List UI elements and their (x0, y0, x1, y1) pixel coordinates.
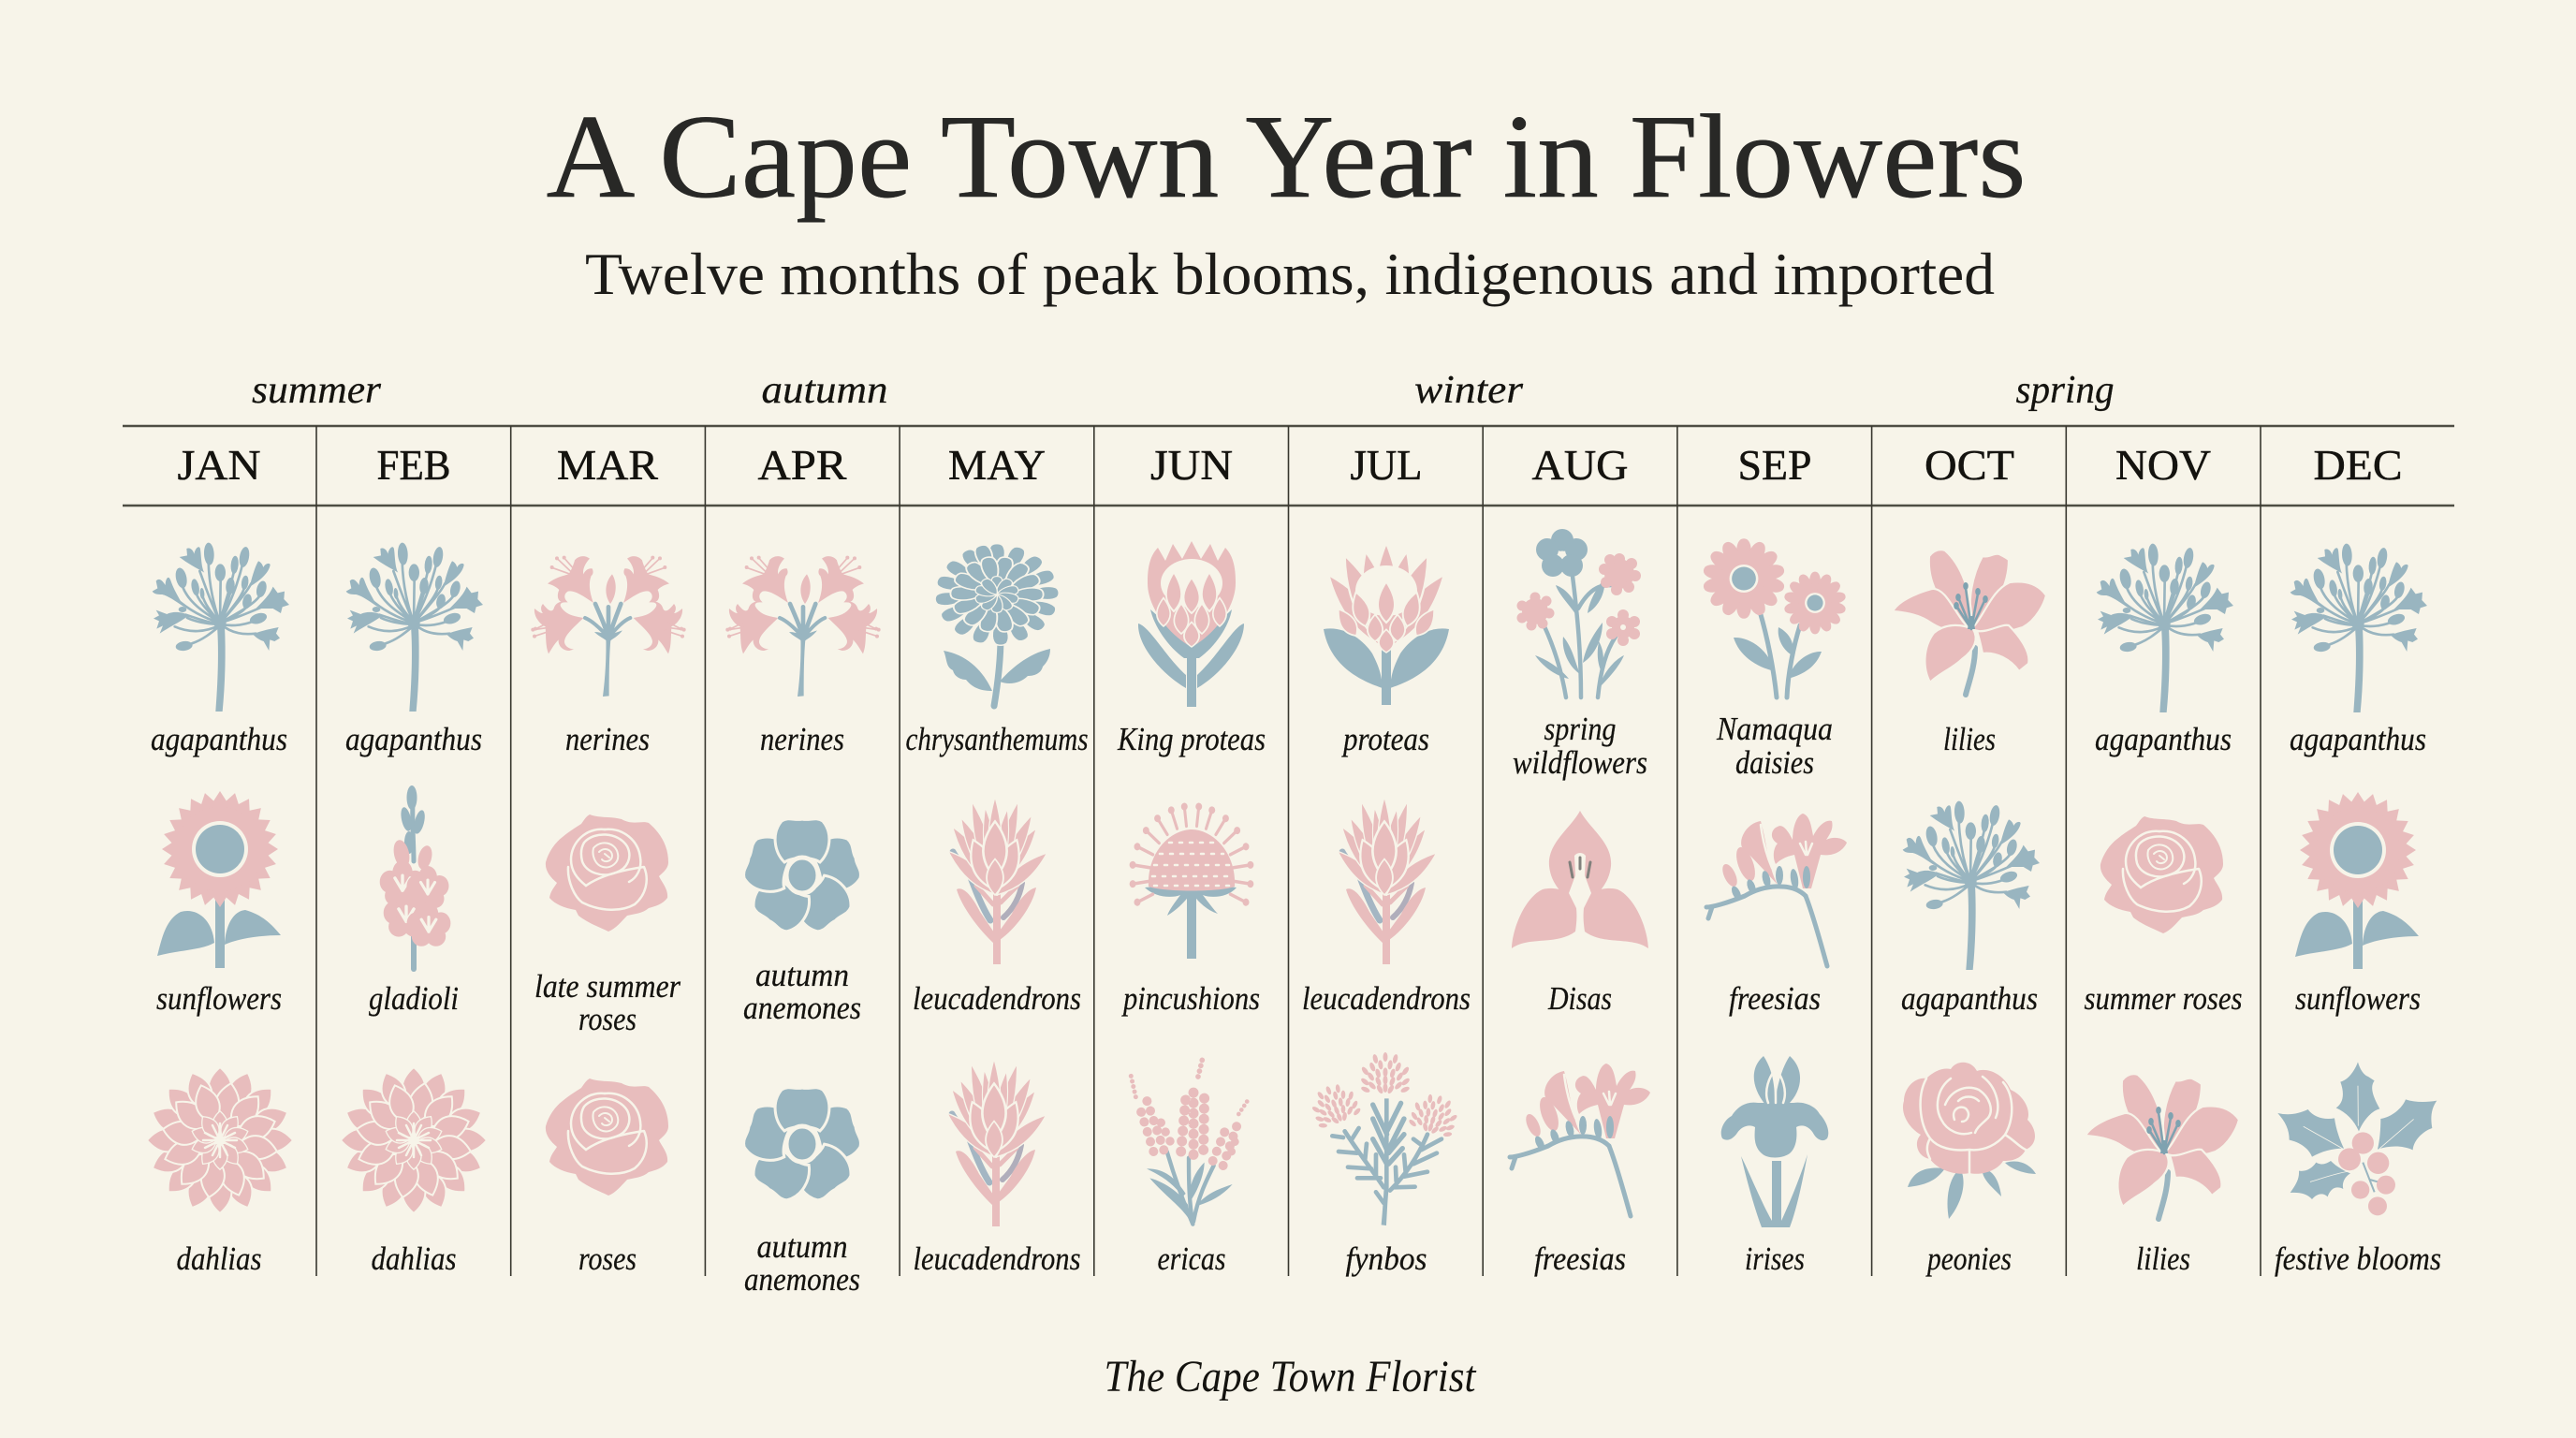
icon: king protea (1138, 541, 1244, 707)
month heading: SEP: SEP (1737, 442, 1812, 489)
icon: anemone (740, 1088, 864, 1206)
label: freesias: freesias (1534, 1240, 1626, 1277)
panel: JUN column (1117, 442, 1266, 1277)
season label: winter: winter (1414, 369, 1524, 412)
label: peonies: peonies (1925, 1240, 2012, 1277)
icon: anemone (740, 819, 864, 937)
icon: iris (1721, 1056, 1828, 1227)
label: leucadendrons: leucadendrons (913, 980, 1081, 1017)
icon: rose (546, 814, 668, 932)
icon: rose (2100, 816, 2223, 933)
label: agapanthus: agapanthus (151, 721, 287, 757)
label: dahlias: dahlias (371, 1240, 457, 1277)
icon: lily (2086, 1074, 2239, 1219)
label: Namaqua daisies: Namaqua (1716, 711, 1833, 747)
subtitle: Twelve months of peak blooms, indigenous and imported (585, 241, 1995, 307)
label: freesias: freesias (1729, 980, 1821, 1017)
icon: fynbos (1305, 1052, 1463, 1225)
panel: DEC column (2275, 442, 2441, 1277)
label: lilies: lilies (2136, 1240, 2190, 1277)
label: leucadendrons: leucadendrons (1302, 980, 1471, 1017)
icon: agapanthus (346, 542, 483, 712)
panel: JUL column (1302, 442, 1471, 1277)
label: gladioli: gladioli (369, 980, 459, 1017)
panel: OCT column (1893, 442, 2046, 1277)
icon: freesia (1510, 1064, 1650, 1216)
label: Disas: Disas (1547, 980, 1612, 1017)
label: autumn anemones: autumn (756, 1228, 848, 1265)
icon: dahlia (147, 1067, 293, 1213)
label: Namaqua daisies (1716, 711, 1833, 781)
icon: pincushion (1129, 802, 1254, 959)
icon: sunflower (2295, 791, 2419, 969)
month heading: AUG: AUG (1531, 442, 1629, 489)
label: lilies: lilies (1943, 721, 1996, 757)
icon: agapanthus (1903, 800, 2040, 970)
label: pincushions: pincushions (1120, 980, 1260, 1017)
icon: lily (1893, 550, 2046, 695)
label: ericas: ericas (1157, 1240, 1226, 1277)
label: nerines: nerines (760, 721, 844, 757)
label: irises: irises (1745, 1240, 1805, 1277)
icon: agapanthus (2097, 543, 2233, 712)
icon: protea (1320, 543, 1453, 705)
label: spring wildflowers (1513, 711, 1647, 781)
label: spring wildflowers: spring (1544, 711, 1616, 747)
icon: sunflower (157, 790, 281, 968)
label: autumn anemones: anemones (743, 990, 861, 1026)
icon: disa (1512, 811, 1648, 948)
month heading: JUN: JUN (1150, 442, 1233, 489)
icon: leucadendron (943, 1059, 1051, 1226)
label: agapanthus: agapanthus (2290, 721, 2426, 757)
panel: AUG column (1510, 442, 1650, 1277)
month heading: JUL: JUL (1350, 442, 1423, 489)
panel: NOV column (2084, 442, 2243, 1277)
label: sunflowers: sunflowers (156, 980, 282, 1017)
panel: MAY column (906, 442, 1088, 1277)
icon: gladiolus (380, 785, 450, 969)
season label: summer: summer (252, 369, 382, 412)
label: autumn anemones: autumn (755, 957, 849, 993)
icon: nerine (531, 556, 686, 697)
label: roses: roses (578, 1240, 637, 1277)
month heading: MAR: MAR (557, 442, 658, 489)
icon: agapanthus (2291, 543, 2427, 712)
month heading: FEB: FEB (376, 442, 451, 489)
label: nerines: nerines (565, 721, 650, 757)
icon: erica (1131, 1055, 1250, 1225)
icon: dahlia (341, 1067, 487, 1213)
icon: Namaqua daisy (1702, 538, 1847, 697)
panel: JAN column (147, 442, 293, 1277)
month heading: APR: APR (758, 442, 846, 489)
icon: peony (1903, 1063, 2036, 1219)
month heading: DEC: DEC (2314, 442, 2402, 489)
icon: chrysanthemum (934, 544, 1060, 706)
label: autumn anemones (743, 957, 861, 1026)
label: late summer roses: late summer (534, 968, 681, 1005)
label: spring wildflowers: wildflowers (1513, 744, 1647, 781)
label: proteas: proteas (1340, 721, 1429, 757)
season label: autumn: autumn (762, 369, 887, 412)
label: autumn anemones (744, 1228, 860, 1298)
label: fynbos: fynbos (1346, 1240, 1427, 1277)
season label: spring: spring (2016, 369, 2114, 412)
label: autumn anemones: anemones (744, 1261, 860, 1298)
icon: leucadendron (1333, 797, 1442, 964)
month heading: JAN: JAN (178, 442, 260, 489)
icon: spring wildflowers (1516, 529, 1641, 697)
label: King proteas: King proteas (1117, 721, 1266, 757)
title: A Cape Town Year in Flowers (547, 90, 2026, 223)
icon: nerine (725, 556, 881, 697)
panel: MAR column (531, 442, 686, 1277)
label: festive blooms: festive blooms (2275, 1240, 2441, 1277)
panel: APR column (725, 442, 881, 1298)
label: agapanthus: agapanthus (2095, 721, 2232, 757)
icon: festive holly and berries (2277, 1062, 2437, 1215)
icon: agapanthus (153, 542, 289, 712)
label: late summer roses (534, 968, 681, 1037)
label: sunflowers: sunflowers (2295, 980, 2421, 1017)
panel: FEB column (341, 442, 487, 1277)
label: Namaqua daisies: daisies (1735, 744, 1814, 781)
label: agapanthus: agapanthus (1901, 980, 2038, 1017)
month heading: OCT: OCT (1925, 442, 2014, 489)
label: dahlias: dahlias (176, 1240, 262, 1277)
icon: freesia (1706, 814, 1847, 966)
label: chrysanthemums: chrysanthemums (906, 721, 1088, 757)
footer credit: The Cape Town Florist (1105, 1352, 1477, 1401)
label: leucadendrons: leucadendrons (914, 1240, 1080, 1277)
icon: rose (546, 1078, 668, 1196)
label: late summer roses: roses (578, 1001, 637, 1037)
month heading: NOV: NOV (2115, 442, 2211, 489)
panel: SEP column (1702, 442, 1847, 1277)
label: summer roses: summer roses (2084, 980, 2243, 1017)
label: agapanthus: agapanthus (345, 721, 482, 757)
icon: leucadendron (944, 797, 1052, 964)
month heading: MAY: MAY (948, 442, 1046, 489)
